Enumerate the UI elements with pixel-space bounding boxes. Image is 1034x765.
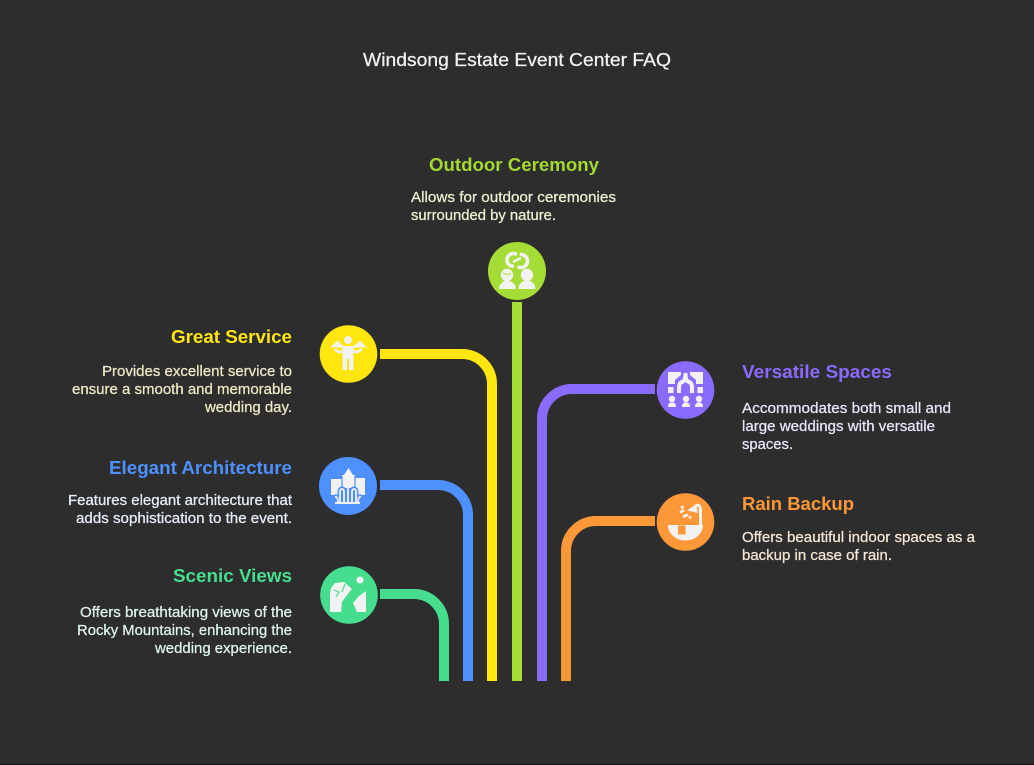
- text: scenic views description: Rocky Mountains, enhancing the: [77, 623, 292, 639]
- icon: linked rings and couple: [488, 242, 546, 300]
- connector: rain backup: [566, 521, 655, 681]
- text: rain backup description: backup in case of rain.: [742, 548, 892, 564]
- text: outdoor ceremony description: surrounded by nature.: [411, 208, 556, 224]
- panel: great service: [72, 325, 377, 416]
- connector: elegant architecture: [380, 485, 468, 681]
- heading: rain backup: Rain Backup: [742, 493, 854, 514]
- icon: shower over indoor bowl: [657, 493, 714, 551]
- text: rain backup description: [742, 530, 976, 564]
- heading: scenic views: Scenic Views: [173, 565, 292, 586]
- panel: rain backup: [657, 493, 976, 564]
- text: scenic views description: wedding experience.: [154, 641, 292, 657]
- text: great service description: [72, 364, 292, 416]
- connector: outdoor ceremony: [512, 302, 522, 681]
- icon: waiter with trays: [320, 325, 377, 383]
- title: Windsong Estate Event Center FAQ: [363, 49, 671, 70]
- connector: great service: [380, 354, 492, 681]
- text: outdoor ceremony description: [411, 190, 616, 224]
- text: elegant architecture description: [68, 493, 292, 527]
- text: versatile spaces description: Accommodates both small and: [742, 401, 951, 417]
- text: scenic views description: Offers breathtaking views of the: [80, 605, 292, 621]
- panel: elegant architecture: [68, 457, 377, 527]
- heading: great service: Great Service: [171, 326, 292, 347]
- text: outdoor ceremony description: Allows for outdoor ceremonies: [411, 190, 616, 206]
- heading: versatile spaces: Versatile Spaces: [742, 361, 892, 382]
- text: elegant architecture description: Features elegant architecture that: [68, 493, 292, 509]
- panel: versatile spaces: [657, 361, 951, 453]
- panel: outdoor ceremony: [411, 154, 616, 300]
- text: scenic views description: [77, 605, 292, 657]
- connector: versatile spaces: [542, 389, 655, 681]
- heading: outdoor ceremony: Outdoor Ceremony: [429, 154, 600, 175]
- text: great service description: wedding day.: [204, 400, 292, 416]
- icon: mountains and moon: [320, 566, 378, 624]
- panel: scenic views: [77, 565, 378, 657]
- icon: room dividers and people: [657, 361, 714, 419]
- text: rain backup description: Offers beautiful indoor spaces as a: [742, 530, 976, 546]
- connector: scenic views: [380, 594, 444, 681]
- text: versatile spaces description: [742, 401, 951, 453]
- text: great service description: ensure a smooth and memorable: [72, 382, 292, 398]
- icon: building with fountain: [319, 457, 377, 515]
- heading: elegant architecture: Elegant Architecture: [109, 457, 292, 478]
- text: versatile spaces description: large weddings with versatile: [742, 419, 935, 435]
- text: elegant architecture description: adds sophistication to the event.: [76, 511, 292, 527]
- text: versatile spaces description: spaces.: [742, 437, 793, 453]
- text: great service description: Provides excellent service to: [102, 364, 292, 380]
